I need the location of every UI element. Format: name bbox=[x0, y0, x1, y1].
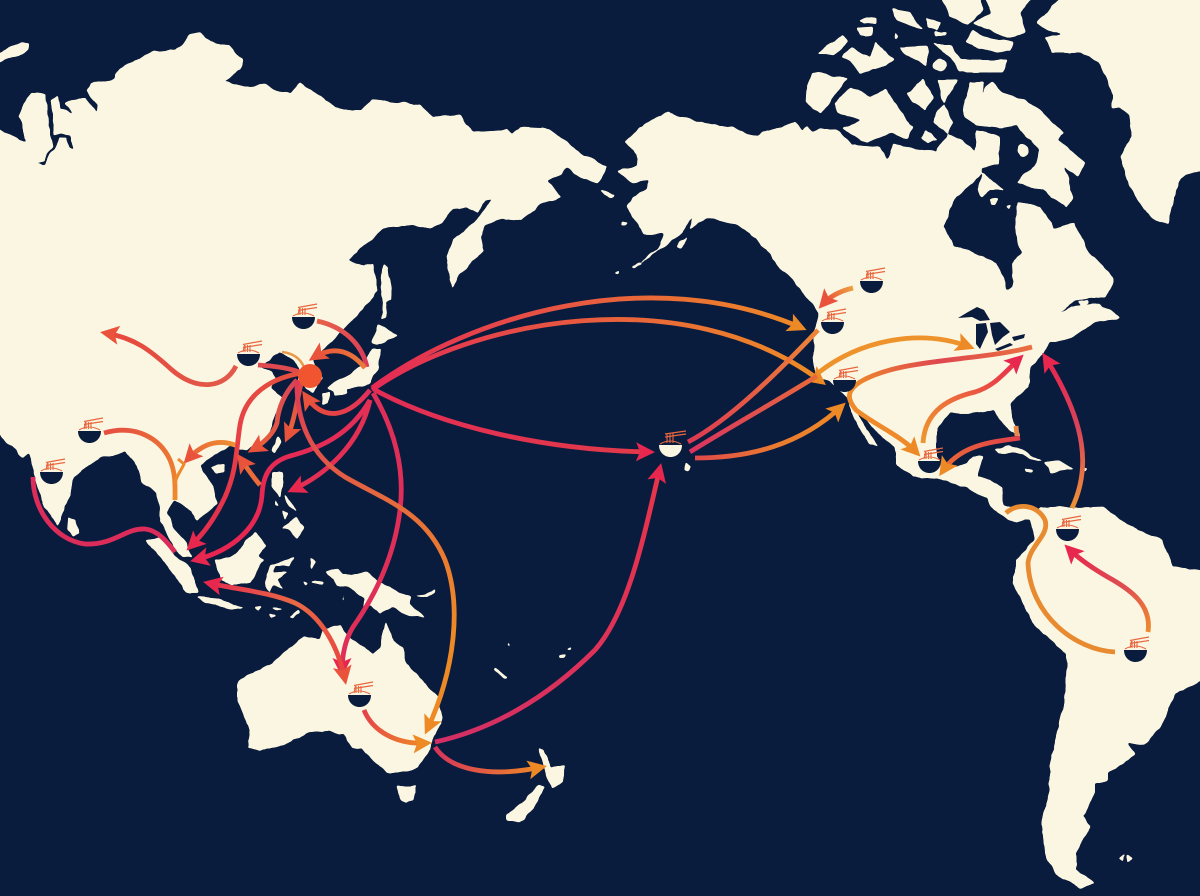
land: island in Foxe Basin bbox=[1018, 144, 1028, 156]
arrow: Canada bowl to Vancouver bbox=[822, 288, 853, 305]
arrow: Bolivia to Panama bbox=[1006, 506, 1115, 652]
land: Kyushu and Shikoku bbox=[322, 389, 346, 405]
icon: bowl California bbox=[833, 367, 858, 392]
land: Taiwan, Hainan, Sri Lanka bbox=[68, 437, 281, 537]
arrow: Japan to Vancouver bbox=[372, 298, 802, 388]
arrow: Mexico to East Coast bbox=[923, 358, 1020, 443]
land: New Zealand bbox=[507, 749, 565, 823]
icon: bowl Mexico bbox=[918, 448, 943, 473]
arrow: central Australia to Sydney bbox=[364, 710, 427, 743]
arrow: Japan to Singapore bbox=[195, 400, 370, 560]
lake: Erie and Ontario bbox=[995, 334, 1025, 351]
land: small Indonesian islands bbox=[256, 558, 435, 618]
lake: Michigan and Huron bbox=[976, 322, 1010, 349]
arrow: Yellow Sea arc bbox=[282, 352, 304, 367]
land: Philippines bbox=[272, 473, 304, 537]
icon: bowl India bbox=[40, 459, 65, 484]
arrow: Hawaii to Vancouver bbox=[688, 330, 818, 442]
land: South America bbox=[1013, 506, 1200, 888]
land: Sakhalin bbox=[381, 265, 392, 318]
arrow: hub to Sydney bbox=[297, 380, 454, 730]
icon: bowl Canada bbox=[860, 268, 885, 293]
land: New Guinea bbox=[326, 568, 425, 619]
arrow: Sydney to New Zealand bbox=[435, 747, 542, 772]
icon: bowl Vancouver bbox=[821, 309, 846, 334]
noodle routes bbox=[33, 288, 1148, 772]
icon: bowl Bolivia bbox=[1124, 637, 1149, 662]
arrow: California to Great Lakes bbox=[818, 338, 970, 373]
land: small Arctic island bbox=[934, 59, 946, 71]
land: Hokkaido bbox=[372, 323, 397, 345]
arrow: Bolivia to Colombia bbox=[1068, 548, 1148, 632]
arrow: Florida stub bbox=[1016, 426, 1017, 436]
land: Java bbox=[198, 597, 243, 609]
arrow: Florida to Mexico bbox=[942, 438, 1020, 472]
land: Eurasia bbox=[0, 33, 607, 558]
arrow: Japan to California bbox=[372, 319, 822, 390]
arrow: Hawaii to California bbox=[690, 376, 817, 452]
arrow: Philippines Sea to South China bbox=[240, 458, 260, 485]
land: Australia bbox=[238, 622, 442, 772]
land: Newfoundland bits bbox=[1075, 301, 1094, 328]
land: Greenland bbox=[1037, 0, 1200, 223]
arrow: Sydney to Hawaii bbox=[435, 468, 660, 742]
arrow: Japan to hub bbox=[305, 390, 370, 414]
land: Pacific islets bbox=[494, 463, 691, 678]
land: Sumatra bbox=[147, 538, 198, 592]
land: Arctic archipelago bbox=[805, 0, 1085, 209]
icon: bowl Northeast China bbox=[292, 304, 317, 329]
icon: bowl Nepal bbox=[78, 418, 103, 443]
arrow: Japan to Korea bbox=[313, 351, 365, 368]
arrow: East Coast via California to Mexico bbox=[849, 347, 1032, 453]
arrow: hub to East China Sea bbox=[287, 380, 302, 438]
land: Honshu bbox=[328, 350, 380, 392]
arrow: Northern China west into Asia bbox=[105, 333, 236, 385]
land: North and Central America bbox=[618, 112, 1120, 522]
arrow: hub to South China coast bbox=[252, 380, 297, 450]
land: Caribbean islands bbox=[995, 446, 1087, 473]
land: Bering and Alaska islands bbox=[600, 191, 687, 275]
land: Borneo bbox=[215, 532, 266, 585]
arrow: Japan to Hawaii bbox=[375, 390, 650, 452]
arrow: Nepal region bowl to Thailand bbox=[104, 430, 175, 500]
arrow: Northern China bowl to hub bbox=[258, 365, 302, 373]
hub marker: Korea bbox=[298, 364, 322, 388]
arrow: Hawaii to Baja coast bbox=[695, 406, 842, 458]
arrow: India to Malay Peninsula bbox=[33, 477, 175, 552]
arrow: South China to Indochina bbox=[187, 442, 235, 460]
icon: bowl Australia bbox=[348, 682, 373, 707]
arrow: Japan to Australia bbox=[342, 393, 401, 672]
land: Arctic sliver bbox=[0, 42, 29, 64]
arrow: Colombia to East Coast bbox=[1045, 357, 1083, 508]
arrow: hub to Southeast Asia bbox=[190, 373, 302, 547]
land: Sulawesi bbox=[265, 558, 295, 593]
icon: bowl Northern China bbox=[237, 341, 262, 366]
land: Tasmania bbox=[397, 786, 416, 804]
land: Falklands bbox=[1118, 855, 1133, 862]
arrow: small branch in Indochina bbox=[175, 459, 184, 484]
lake: Superior bbox=[958, 307, 990, 321]
icon: bowl Colombia bbox=[1056, 516, 1081, 541]
arrow: Japan to Philippines bbox=[292, 400, 370, 490]
icon: bowl Hawaii bbox=[659, 431, 686, 457]
arrow: Northeast China to Japan bbox=[317, 321, 367, 367]
arrow: Java to central Australia, two-way bbox=[208, 583, 345, 680]
Great Lakes bbox=[958, 307, 1025, 351]
